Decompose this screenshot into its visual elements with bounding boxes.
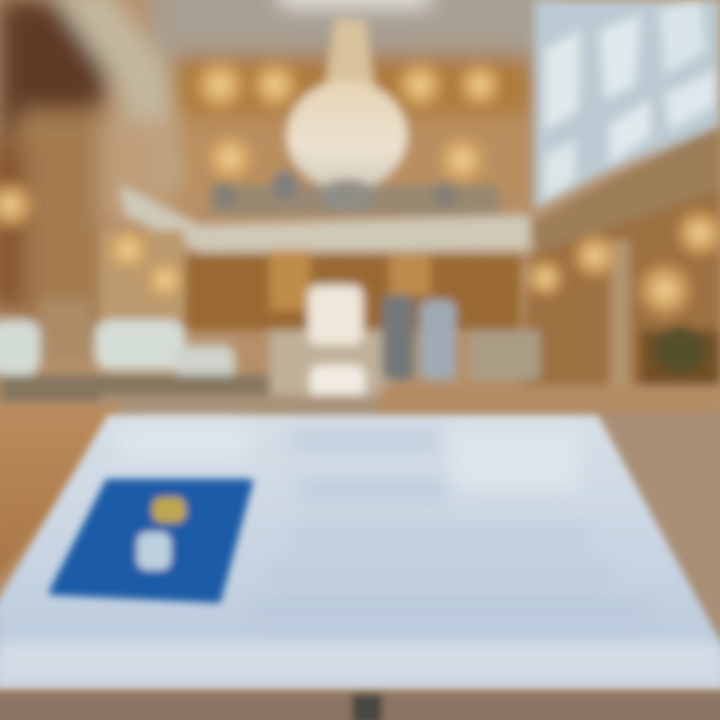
right glass facade — [535, 0, 720, 210]
lobby seating, left — [0, 300, 280, 405]
document sheet — [0, 415, 720, 690]
icon: blue logo square — [52, 482, 250, 600]
ceiling — [150, 0, 550, 205]
right curved beam and lower right wall — [520, 125, 720, 400]
document text haze — [250, 430, 650, 614]
warm ceiling lights — [0, 55, 720, 322]
document lower edge — [0, 642, 720, 678]
floor right — [590, 412, 720, 650]
floor — [100, 385, 720, 430]
central white column and people — [270, 285, 540, 415]
chandelier — [212, 20, 458, 211]
lower centre wood wall — [100, 230, 520, 330]
bottom table edge — [0, 692, 720, 720]
floor left — [0, 405, 120, 590]
left dark corner and beam — [0, 0, 180, 340]
blurred upper scene — [0, 0, 720, 430]
document bright panel — [120, 425, 580, 490]
balcony band — [120, 185, 530, 252]
